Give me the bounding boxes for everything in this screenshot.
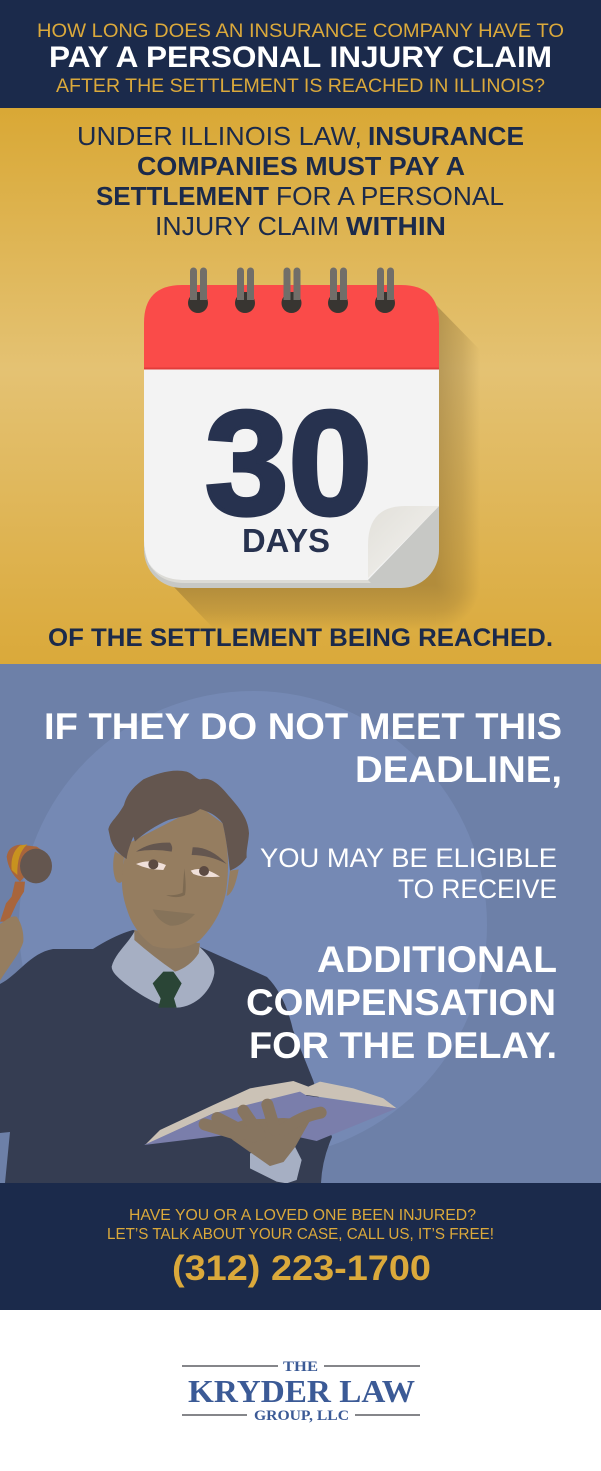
- panel: header banner: [0, 0, 601, 108]
- book and open hand: [144, 1081, 397, 1183]
- heading line 3: AFTER THE SETTLEMENT IS REACHED IN ILLINOIS?: [56, 75, 545, 97]
- text block: additional compensation: ADDITIONAL: [317, 939, 557, 980]
- neck, collar and tie: [112, 930, 214, 1008]
- text block: Illinois law statement: INSURANCE: [368, 121, 524, 151]
- heading line 2: PAY A PERSONAL INJURY CLAIM: [49, 41, 552, 74]
- call to action text: [107, 1207, 494, 1243]
- text block: Illinois law statement: COMPANIES MUST PAY A: [137, 151, 465, 181]
- text block: Illinois law statement: UNDER ILLINOIS LAW,: [77, 121, 362, 151]
- number 30: 30: [205, 381, 372, 546]
- text block: Illinois law statement: [77, 121, 524, 241]
- text block: Illinois law statement: INJURY CLAIM: [155, 211, 339, 241]
- calendar fold curl: [368, 506, 439, 578]
- text block: of the settlement being reached: OF THE SETTLEMENT BEING REACHED.: [48, 624, 553, 652]
- hand on book: [205, 1105, 321, 1166]
- gavel and raised hand: [0, 844, 52, 981]
- illustration: lawyer with gavel and book: [0, 771, 397, 1183]
- panel: gold deadline section: [0, 108, 601, 664]
- logo word GROUP, LLC: GROUP, LLC: [254, 1408, 349, 1424]
- text block: additional compensation: [246, 939, 557, 1066]
- nose and mouth: [166, 868, 186, 897]
- hair: [108, 771, 249, 871]
- label DAYS: DAYS: [242, 522, 330, 559]
- eyebrows: [136, 843, 227, 864]
- suit body: [0, 930, 332, 1183]
- panel: blue consequence section: [0, 664, 601, 1183]
- text block: Illinois law statement: WITHIN: [346, 211, 446, 241]
- calendar binding rings: [188, 268, 395, 313]
- text block: if they do not meet this deadline: [44, 706, 562, 790]
- text block: Illinois law statement: SETTLEMENT: [96, 181, 269, 211]
- text block: you may be eligible: [260, 843, 557, 904]
- text block: additional compensation: FOR THE DELAY.: [249, 1025, 557, 1066]
- call to action text: HAVE YOU OR A LOVED ONE BEEN INJURED?: [129, 1207, 476, 1224]
- panel: law firm logo: [0, 1310, 601, 1471]
- call to action text: LET’S TALK ABOUT YOUR CASE, CALL US, IT’S FREE!: [107, 1226, 494, 1243]
- panel: call to action footer: [0, 1183, 601, 1310]
- logo word THE: THE: [283, 1359, 318, 1375]
- text block: if they do not meet this deadline: IF THEY DO NOT MEET THIS: [44, 706, 562, 747]
- head: [108, 771, 249, 948]
- heading line 1: HOW LONG DOES AN INSURANCE COMPANY HAVE TO: [37, 20, 564, 42]
- icon: calendar showing 30 days: [144, 268, 480, 630]
- shirt cuff: [250, 1143, 302, 1183]
- phone number: (312) 223-1700: [172, 1249, 431, 1288]
- text block: if they do not meet this deadline: DEADLINE,: [355, 749, 562, 790]
- text block: Illinois law statement: FOR A PERSONAL: [276, 181, 504, 211]
- eyes: [136, 861, 220, 877]
- text block: additional compensation: COMPENSATION: [246, 982, 556, 1023]
- text block: you may be eligible: YOU MAY BE ELIGIBLE: [260, 843, 557, 873]
- logo word KRYDER LAW: KRYDER LAW: [188, 1373, 415, 1409]
- text block: you may be eligible: TO RECEIVE: [398, 874, 557, 904]
